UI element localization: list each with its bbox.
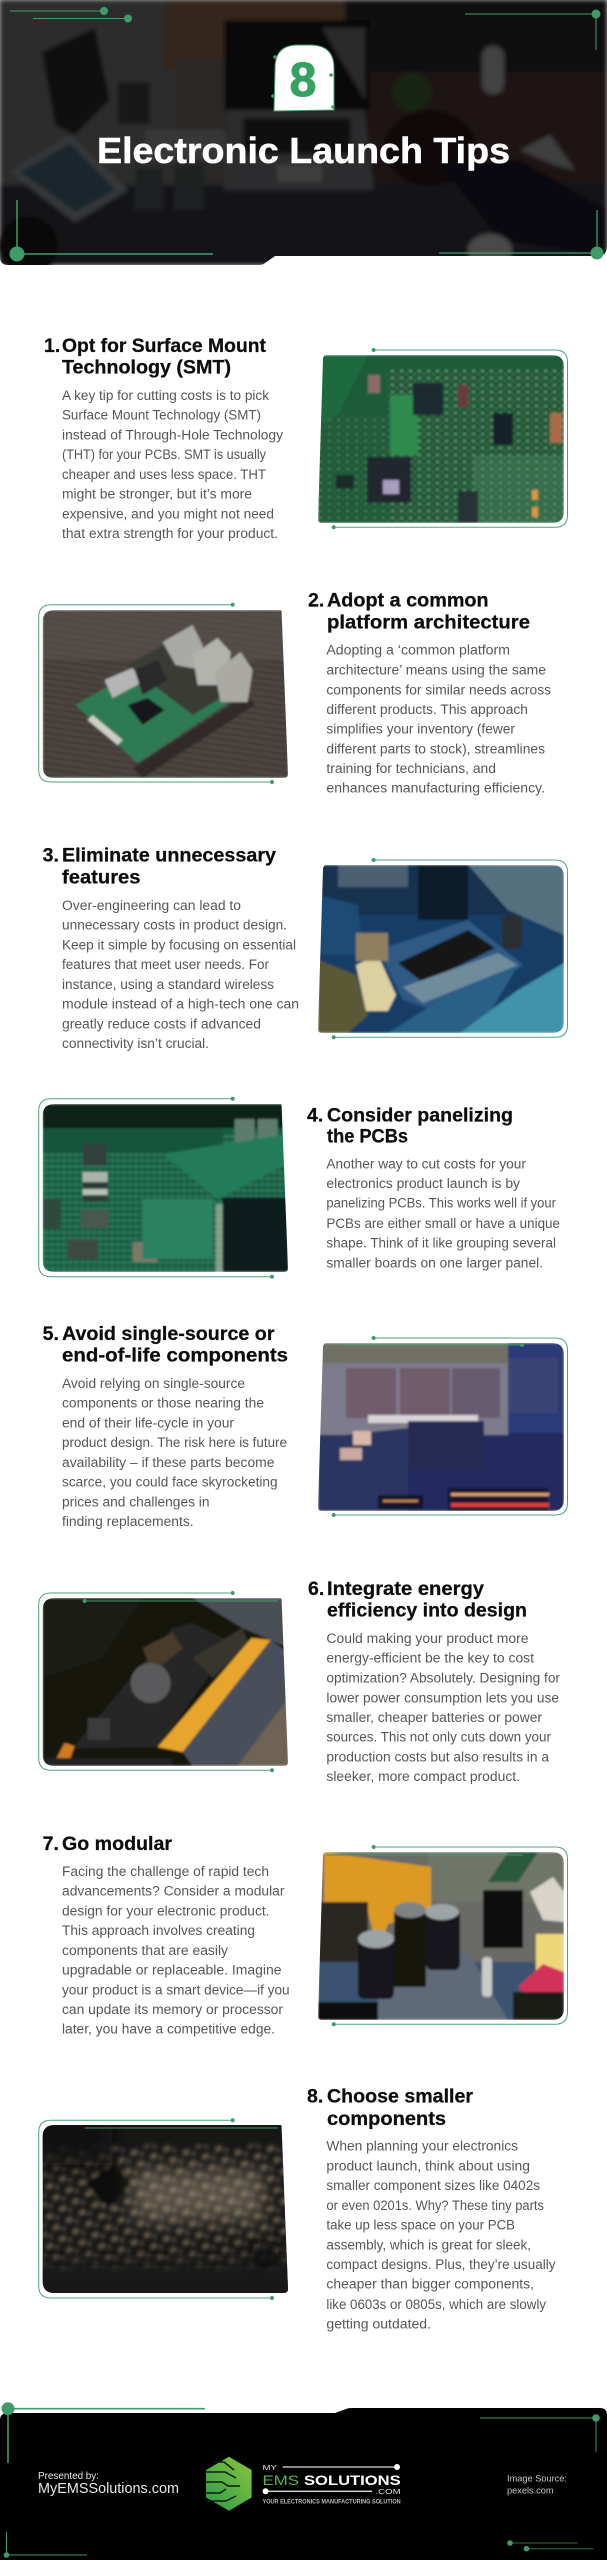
tip 7 text: Facing the challenge of rapid tech bbox=[62, 1864, 269, 1879]
tip 1 photo: green circuit board bbox=[318, 355, 564, 523]
tip 7 text: This approach involves creating bbox=[62, 1923, 255, 1938]
tip 6 text: smaller, cheaper batteries or power bbox=[326, 1710, 543, 1725]
tip 6 heading: efficiency into design bbox=[327, 1600, 527, 1622]
tip 4 heading: Consider panelizing bbox=[327, 1105, 513, 1127]
tip 3 text: unnecessary costs in product design. bbox=[62, 918, 287, 933]
tip 6 text: sources. This not only cuts down your bbox=[326, 1730, 552, 1745]
tip 4 text: shape. Think of it like grouping several bbox=[326, 1236, 556, 1251]
footer circuit lines: top right bbox=[480, 2414, 600, 2452]
tip 4 heading bbox=[307, 1105, 513, 1148]
tip 5 text: product design. The risk here is future bbox=[62, 1435, 287, 1450]
header panel: dark desk photo bbox=[0, 0, 607, 276]
presented by credit bbox=[38, 2470, 179, 2497]
tip 2 text: architecture’ means using the same bbox=[326, 663, 546, 678]
tip 2 text bbox=[326, 643, 551, 796]
icon: circuit hexagon bbox=[206, 2457, 252, 2511]
tip 5 heading bbox=[43, 1323, 288, 1367]
tip 8 text: like 0603s or 0805s, which are slowly bbox=[326, 2297, 546, 2312]
tip 4 frame bbox=[39, 1097, 274, 1279]
tip 2 text: different products. This approach bbox=[326, 702, 528, 717]
tip 2 text: Adopting a ‘common platform bbox=[326, 643, 510, 658]
tip 2 heading bbox=[308, 590, 530, 633]
tip 8 text: product launch, think about using bbox=[326, 2158, 530, 2173]
tip 8 heading: components bbox=[327, 2108, 446, 2130]
tip 8 text: getting outdated. bbox=[326, 2317, 431, 2332]
tip 5 text: finding replacements. bbox=[62, 1514, 194, 1529]
tip 6 text: lower power consumption lets you use bbox=[326, 1690, 559, 1705]
tip 4 text: smaller boards on one larger panel. bbox=[326, 1256, 543, 1271]
tip 7 text: upgradable or replaceable. Imagine bbox=[62, 1963, 282, 1978]
tip 1 text: instead of Through-Hole Technology bbox=[62, 427, 283, 442]
tip 1 frame bbox=[332, 348, 568, 529]
tip 3 heading: 3. bbox=[43, 845, 59, 867]
tip 5 text: prices and challenges in bbox=[62, 1494, 210, 1509]
tip 8 panel bbox=[33, 2086, 556, 2332]
tip 6 heading: Integrate energy bbox=[327, 1578, 484, 1600]
tip 1 text bbox=[62, 388, 283, 541]
tip 8 heading: Choose smaller bbox=[327, 2086, 473, 2108]
header circuit lines: bottom left bbox=[10, 200, 213, 262]
tip 1 heading: Technology (SMT) bbox=[62, 356, 231, 378]
presented by credit: MyEMSSolutions.com bbox=[38, 2480, 179, 2497]
tip 3 heading: Eliminate unnecessary bbox=[62, 845, 276, 867]
tip 1 text: Surface Mount Technology (SMT) bbox=[62, 408, 261, 423]
tip 5 heading: Avoid single-source or bbox=[62, 1323, 275, 1345]
tip 2 heading: 2. bbox=[308, 590, 324, 612]
image source credit bbox=[507, 2474, 567, 2496]
tip 3 text: instance, using a standard wireless bbox=[62, 977, 274, 992]
tip 5 frame bbox=[332, 1336, 568, 1517]
tip 2 heading: platform architecture bbox=[327, 611, 530, 633]
tip 6 text: energy-efficient be the key to cost bbox=[326, 1651, 534, 1666]
tip 8 text bbox=[326, 2139, 556, 2332]
tip 6 text bbox=[326, 1631, 561, 1784]
tip 8 text: take up less space on your PCB bbox=[326, 2218, 515, 2233]
tip 6 panel bbox=[39, 1578, 561, 1784]
tip 7 heading: Go modular bbox=[62, 1833, 172, 1855]
tip 4 photo: green board with chip bbox=[43, 1104, 289, 1272]
tip 5 text: end of their life-cycle in your bbox=[62, 1415, 235, 1430]
tip 5 text bbox=[62, 1376, 287, 1529]
number badge: 8 bbox=[290, 54, 316, 107]
footer circuit lines: top left bbox=[2, 2402, 205, 2463]
tip 3 text bbox=[62, 898, 299, 1051]
tip 1 text: cheaper and uses less space. THT bbox=[62, 467, 266, 482]
tip 3 text: Keep it simple by focusing on essential bbox=[62, 937, 296, 952]
tip 5 text: Avoid relying on single-source bbox=[62, 1376, 245, 1391]
tip 2 text: simplifies your inventory (fewer bbox=[326, 722, 516, 737]
tip 4 text: electronics product launch is by bbox=[326, 1176, 520, 1191]
footer circuit lines: bottom left bbox=[4, 2532, 87, 2558]
tip 7 text: advancements? Consider a modular bbox=[62, 1884, 285, 1899]
tip 4 text bbox=[326, 1157, 560, 1271]
tip 4 text: PCBs are either small or have a unique bbox=[326, 1216, 560, 1231]
tip 3 text: connectivity isn’t crucial. bbox=[62, 1036, 209, 1051]
tip 7 photo: capacitors close-up bbox=[318, 1852, 564, 2020]
tip 7 text: components that are easily bbox=[62, 1943, 228, 1958]
tip 5 panel bbox=[43, 1323, 568, 1529]
tip 3 text: Over-engineering can lead to bbox=[62, 898, 241, 913]
image source credit: pexels.com bbox=[507, 2486, 554, 2496]
tip 1 heading bbox=[44, 335, 266, 378]
tip 7 text: can update its memory or processor bbox=[62, 2002, 284, 2017]
tip 2 text: different parts to stock), streamlines bbox=[326, 741, 545, 756]
tip 5 text: availability – if these parts become bbox=[62, 1455, 274, 1470]
tip 7 heading: 7. bbox=[43, 1833, 59, 1855]
tip 5 photo: memory chips in purple light bbox=[318, 1343, 564, 1511]
logo: YOUR ELECTRONICS MANUFACTURING SOLUTION bbox=[262, 2499, 401, 2505]
tip 2 heading: Adopt a common bbox=[327, 590, 489, 612]
footer circuit lines: bottom right bbox=[507, 2540, 594, 2552]
tip 2 text: enhances manufacturing efficiency. bbox=[326, 781, 545, 796]
tip 2 text: components for similar needs across bbox=[326, 682, 551, 697]
tip 6 heading: 6. bbox=[308, 1578, 324, 1600]
tip 1 panel bbox=[44, 335, 568, 541]
header circuit lines: top right bbox=[465, 10, 600, 50]
tip 8 text: assembly, which is great for sleek, bbox=[326, 2237, 531, 2252]
tip 8 text: When planning your electronics bbox=[326, 2139, 518, 2154]
tip 1 text: might be stronger, but it’s more bbox=[62, 487, 252, 502]
tip 2 frame bbox=[39, 603, 274, 784]
tip 4 heading: the PCBs bbox=[327, 1126, 408, 1148]
tip 5 heading: 5. bbox=[43, 1323, 59, 1345]
tip 3 text: greatly reduce costs if advanced bbox=[62, 1016, 261, 1031]
tip 2 panel bbox=[39, 590, 551, 796]
tip 1 text: expensive, and you might not need bbox=[62, 506, 274, 521]
title: Electronic Launch Tips bbox=[97, 130, 510, 171]
number badge bbox=[271, 45, 335, 111]
tip 7 frame bbox=[332, 1845, 568, 2026]
tip 8 heading: 8. bbox=[307, 2086, 323, 2108]
footer panel bbox=[0, 2408, 607, 2560]
tip 6 text: production costs but also results in a bbox=[326, 1749, 550, 1764]
tip 3 text: features that meet user needs. For bbox=[62, 957, 270, 972]
tip 5 text: components or those nearing the bbox=[62, 1396, 264, 1411]
tip 7 text: later, you have a competitive edge. bbox=[62, 2022, 275, 2037]
tip 1 text: A key tip for cutting costs is to pick bbox=[62, 388, 269, 403]
tip 6 text: sleeker, more compact product. bbox=[326, 1769, 520, 1784]
tip 8 text: compact designs. Plus, they’re usually bbox=[326, 2257, 556, 2272]
tip 7 panel bbox=[43, 1833, 568, 2037]
tip 4 text: Another way to cut costs for your bbox=[326, 1157, 527, 1172]
image source credit: Image Source: bbox=[507, 2474, 567, 2485]
tip 7 text: design for your electronic product. bbox=[62, 1903, 270, 1918]
header circuit lines: bottom right bbox=[439, 210, 604, 260]
tip 5 text: scarce, you could face skyrocketing bbox=[62, 1475, 278, 1490]
tip 6 frame bbox=[39, 1591, 274, 1772]
tip 6 photo: motherboard with yellow label bbox=[43, 1598, 289, 1766]
tip 3 photo: blue circuit board bbox=[318, 865, 564, 1033]
logo: MY bbox=[262, 2463, 277, 2472]
tip 1 heading: 1. bbox=[44, 335, 60, 357]
tip 8 text: smaller component sizes like 0402s bbox=[326, 2178, 540, 2193]
tip 6 heading bbox=[308, 1578, 527, 1622]
tip 4 heading: 4. bbox=[307, 1105, 323, 1127]
tip 4 text: panelizing PCBs. This works well if your bbox=[326, 1196, 557, 1211]
tip 7 text: your product is a smart device—if you bbox=[62, 1982, 290, 1997]
tip 4 panel bbox=[39, 1097, 560, 1279]
logo: EMS bbox=[262, 2472, 299, 2488]
tip 3 text: module instead of a high-tech one can bbox=[62, 997, 299, 1012]
tip 3 panel bbox=[43, 845, 568, 1051]
tip 8 text: cheaper than bigger components, bbox=[326, 2277, 534, 2292]
tip 3 heading bbox=[43, 845, 276, 888]
tip 1 text: (THT) for your PCBs. SMT is usually bbox=[62, 447, 266, 462]
tip 7 text bbox=[62, 1864, 290, 2037]
tip 8 photo: dark board macro bbox=[42, 2125, 288, 2293]
tip 8 text: or even 0201s. Why? These tiny parts bbox=[326, 2198, 544, 2213]
tip 1 heading: Opt for Surface Mount bbox=[62, 335, 266, 357]
tip 3 heading: features bbox=[62, 866, 141, 888]
tip 2 text: training for technicians, and bbox=[326, 761, 496, 776]
header circuit lines: top left bbox=[10, 7, 132, 22]
tip 3 frame bbox=[332, 858, 568, 1039]
tip 8 frame bbox=[39, 2118, 274, 2300]
tip 5 heading: end-of-life components bbox=[62, 1345, 288, 1367]
tip 2 photo: small board on wood bbox=[43, 610, 289, 778]
tip 6 text: Could making your product more bbox=[326, 1631, 528, 1646]
logo bbox=[206, 2457, 401, 2511]
presented by credit: Presented by: bbox=[38, 2470, 99, 2482]
tip 6 text: optimization? Absolutely. Designing for bbox=[326, 1670, 561, 1685]
tip 1 text: that extra strength for your product. bbox=[62, 526, 278, 541]
logo: SOLUTIONS bbox=[304, 2472, 401, 2488]
logo: .COM bbox=[376, 2487, 401, 2496]
tip 8 heading bbox=[307, 2086, 473, 2130]
